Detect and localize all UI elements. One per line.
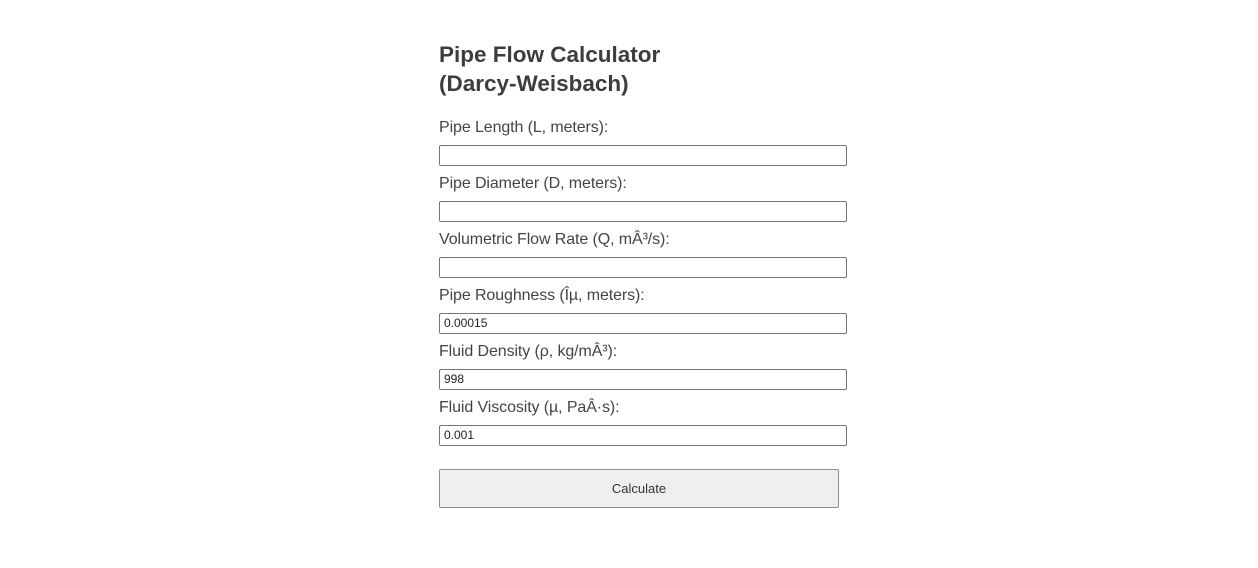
input: density — [439, 369, 847, 390]
input: flow rate — [439, 257, 847, 278]
input: viscosity — [439, 425, 847, 446]
button: calculate: Calculate — [612, 481, 666, 496]
input: viscosity: 0.001 — [444, 428, 474, 442]
label: flow rate: Volumetric Flow Rate (Q, mÂ³/s): — [439, 231, 670, 248]
input: pipe length — [439, 145, 847, 166]
button: calculate — [439, 469, 839, 508]
label: density: Fluid Density (ρ, kg/mÂ³): — [439, 343, 617, 360]
label: roughness: Pipe Roughness (Îµ, meters): — [439, 287, 645, 304]
label: pipe length: Pipe Length (L, meters): — [439, 119, 608, 136]
input: roughness: 0.00015 — [444, 316, 487, 330]
input: pipe diameter — [439, 201, 847, 222]
input: roughness — [439, 313, 847, 334]
title: Pipe Flow Calculator — [439, 42, 660, 67]
label: viscosity: Fluid Viscosity (µ, PaÂ·s): — [439, 399, 620, 416]
input: density: 998 — [444, 372, 464, 386]
label: pipe diameter: Pipe Diameter (D, meters): — [439, 175, 627, 192]
title — [439, 42, 660, 96]
title: (Darcy-Weisbach) — [439, 71, 629, 96]
